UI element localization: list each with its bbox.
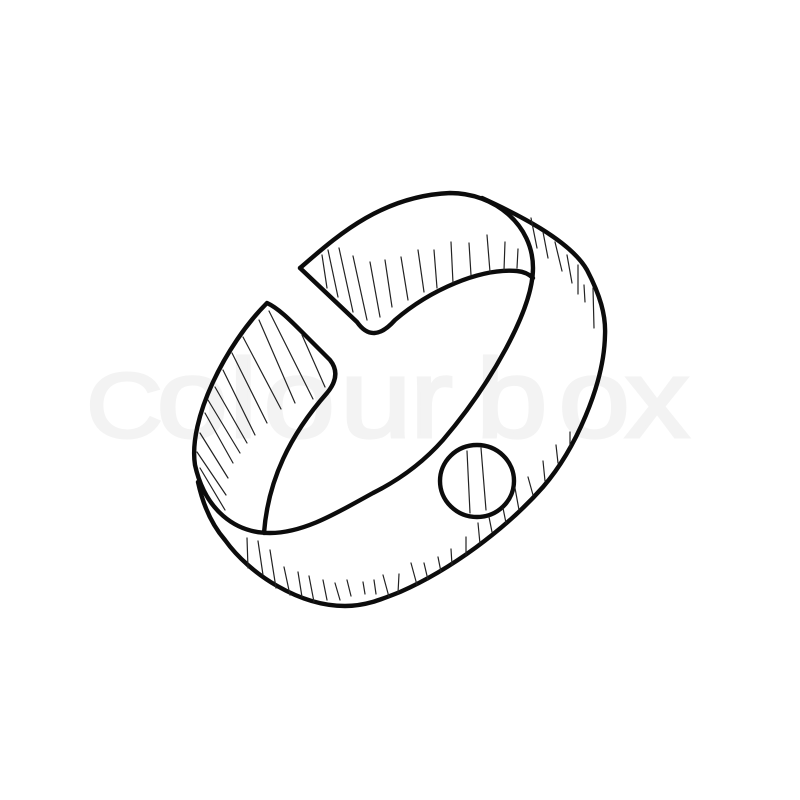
button circle [440,445,514,517]
watermark: Colourbox: Colourbox [86,336,689,461]
wristband outline [194,193,605,606]
hatching lines [197,218,594,602]
top band inner edge [300,268,533,333]
top band outer edge and left band [194,193,533,533]
outer back edge [198,198,605,606]
